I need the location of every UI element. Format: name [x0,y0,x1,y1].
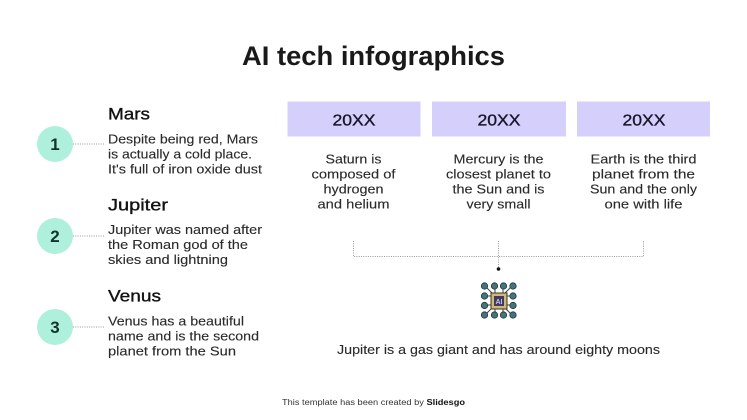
text: Earth: planet from the [592,166,695,182]
heading: Venus: Venus [108,286,161,306]
connector 2 [73,235,104,237]
number badge 3: 3 [50,318,60,337]
text: Venus description [108,314,259,358]
text: Mercury: the Sun and is [452,182,545,196]
text: Jupiter description: the Roman god of the [108,237,248,252]
icon: AI chip [481,283,516,318]
text: Venus description: name and is the second [108,328,259,344]
text: Mars description: Despite being red, Mars [108,132,259,146]
number badge 3 [37,309,73,345]
number badge 1: 1 [50,135,60,154]
text: Saturn: and helium [318,196,390,212]
footer credit: This template has been created by Slidesgo [282,398,465,407]
icon: AI chip: AI [496,299,503,306]
text: Jupiter description [108,222,263,267]
title: AI tech infographics [242,41,505,71]
year box 1: 20XX [332,112,376,130]
text: Mercury: Mercury is the [454,152,544,166]
text: Earth [590,152,698,212]
panel: column 1 [288,102,420,212]
number badge 2 [37,218,73,254]
text: Jupiter caption: Jupiter is a gas giant and has around eighty moons [337,342,661,357]
text: Mars description: It's full of iron oxide dust [108,162,262,176]
text: Mercury [446,152,551,212]
number badge 1 [37,126,73,162]
text: Saturn: Saturn is [326,152,382,166]
text: Saturn: composed of [312,166,396,182]
panel: Mars [37,104,262,176]
text: Earth: Sun and the only [590,182,698,196]
text: Venus description: planet from the Sun [108,344,236,358]
bracket connector [354,241,644,271]
text: Mercury: closest planet to [446,166,551,182]
panel: column 2 [432,102,566,212]
panel: column 3 [577,102,710,212]
text: Jupiter description: skies and lightning [108,252,228,267]
text: Mars description: is actually a cold place. [108,146,252,162]
panel: Venus [37,286,259,358]
connector 1 [73,143,104,145]
text: Earth: one with life [604,196,682,212]
number badge 2: 2 [50,227,60,246]
text: Earth: Earth is the third [590,152,696,166]
heading: Mars: Mars [108,104,150,124]
connector 3 [73,326,104,328]
text: Mercury: very small [466,196,531,212]
text: Mars description [108,132,262,176]
text: Saturn: hydrogen [324,182,384,196]
year box 3: 20XX [622,112,666,130]
panel: Jupiter [37,196,263,267]
text: Venus description: Venus has a beautiful [108,314,244,328]
text: Saturn [312,152,396,212]
text: Jupiter description: Jupiter was named after [108,222,263,237]
year box 2: 20XX [478,112,521,130]
heading: Jupiter: Jupiter [108,196,168,214]
